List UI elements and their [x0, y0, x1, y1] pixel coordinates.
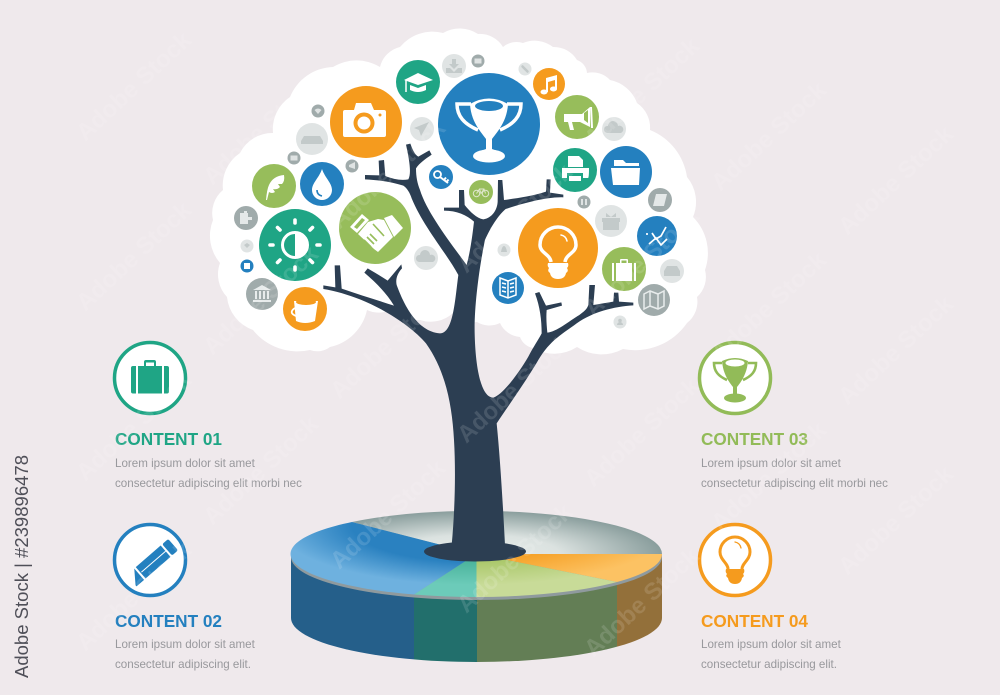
- icon: mail small: [472, 54, 484, 68]
- stock watermark pattern: Adobe Stock: [198, 70, 324, 190]
- body text: consectetur adipiscing elit morbi nec: [701, 477, 888, 490]
- pie sector: green: [476, 554, 617, 597]
- stock watermark pattern: Adobe Stock: [325, 284, 451, 404]
- icon: puzzle: [234, 206, 258, 230]
- body text: [115, 457, 302, 490]
- stock watermark pattern: Adobe Stock: [579, 32, 705, 152]
- icon: map: [638, 284, 670, 316]
- icon: sun brightness: [259, 209, 331, 281]
- panel: content 04: [700, 524, 842, 671]
- heading: CONTENT 04: [701, 611, 808, 631]
- icon: gift: [595, 205, 627, 237]
- stock watermark pattern: Adobe Stock: [452, 328, 578, 448]
- icon: bulb badge: [700, 524, 770, 596]
- icon bubbles on the tree: [234, 54, 684, 331]
- icon: feather: [252, 164, 296, 208]
- stock watermark pattern: Adobe Stock: [833, 290, 959, 410]
- pie chart cylinder base: [291, 511, 662, 664]
- icon: camera: [330, 86, 402, 158]
- stock watermark pattern: Adobe Stock: [833, 120, 959, 240]
- icon: megaphone: [555, 95, 599, 139]
- icon: trophy: [438, 73, 540, 175]
- icon: line chart: [637, 216, 677, 256]
- body text: consectetur adipiscing elit.: [115, 658, 251, 671]
- stock watermark pattern: Adobe Stock: [198, 240, 324, 360]
- stock watermark pattern: Adobe Stock: [325, 114, 451, 234]
- icon: open book: [492, 272, 524, 304]
- cylinder rim: [291, 514, 662, 600]
- heading: CONTENT 02: [115, 611, 222, 631]
- icon: car: [296, 123, 328, 155]
- stock watermark pattern: Adobe Stock: [71, 26, 197, 146]
- icon: cloud: [414, 246, 438, 270]
- icon: taxi: [660, 259, 684, 283]
- icon: briefcase: [602, 247, 646, 291]
- body text: Lorem ipsum dolor sit amet: [701, 457, 842, 470]
- panel: content 03: [700, 342, 888, 490]
- icon: mail: [288, 152, 300, 164]
- body text: [701, 638, 842, 671]
- icon: water drop: [300, 162, 344, 206]
- heading: CONTENT 01: [115, 429, 222, 449]
- stock watermark pattern: Adobe Stock: [71, 196, 197, 316]
- icon: paper plane: [410, 117, 434, 141]
- icon: handshake: [339, 192, 411, 264]
- icon: light bulb: [518, 208, 598, 288]
- stock watermark pattern: Adobe Stock: [452, 158, 578, 278]
- icon: notebook: [648, 188, 672, 212]
- stock watermark pattern: Adobe Stock: [71, 366, 197, 486]
- icon: pencil badge: [114, 524, 186, 596]
- icon: graduation cap: [396, 60, 440, 104]
- pie sector: orange: [476, 554, 662, 582]
- stock watermark pattern: Adobe Stock: [452, 498, 578, 618]
- icon: link: [518, 62, 532, 76]
- icon: pause: [578, 196, 590, 208]
- white tree crown cloud: [210, 28, 708, 354]
- pie sector: grey: [352, 511, 662, 554]
- stock watermark pattern: Adobe Stock: [706, 416, 832, 536]
- body text: Lorem ipsum dolor sit amet: [115, 457, 256, 470]
- tree silhouette: [323, 144, 633, 562]
- stock watermark pattern: Adobe Stock: [198, 410, 324, 530]
- icon: download: [442, 54, 466, 78]
- icon: small blue badge: [240, 260, 254, 272]
- icon: printer: [553, 148, 597, 192]
- pie sector: blue: [291, 522, 476, 594]
- icon: bucket: [283, 287, 327, 331]
- icon: bell: [498, 244, 510, 256]
- body text: Lorem ipsum dolor sit amet: [701, 638, 842, 651]
- icon: bank: [246, 278, 278, 310]
- icon: key: [429, 165, 453, 189]
- stock watermark pattern: Adobe Stock: [706, 76, 832, 196]
- heading: CONTENT 03: [701, 429, 808, 449]
- icon: small badge: [240, 240, 254, 252]
- body text: [115, 638, 256, 671]
- icon: folder: [600, 146, 652, 198]
- body text: consectetur adipiscing elit.: [701, 658, 837, 671]
- stock watermark pattern: Adobe Stock: [579, 542, 705, 662]
- icon: user: [614, 316, 626, 328]
- icon: cloud upload: [602, 117, 626, 141]
- icon: small megaphone: [346, 160, 358, 172]
- stock watermark pattern: Adobe Stock: [706, 246, 832, 366]
- pie sector: teal: [414, 554, 476, 597]
- vertical stock credit line: Adobe Stock | #239896478: [12, 455, 32, 678]
- stock watermark pattern: Adobe Stock: [579, 202, 705, 322]
- panel: content 02: [114, 524, 256, 671]
- icon: bicycle: [469, 180, 493, 204]
- stock watermark pattern: Adobe Stock: [71, 536, 197, 656]
- icon: briefcase badge: [114, 342, 186, 414]
- stock watermark pattern: Adobe Stock: [579, 372, 705, 492]
- body text: consectetur adipiscing elit morbi nec: [115, 477, 302, 490]
- stock watermark pattern: Adobe Stock: [833, 460, 959, 580]
- panel: content 01: [114, 342, 302, 490]
- cylinder side wall: [291, 554, 662, 664]
- body text: Lorem ipsum dolor sit amet: [115, 638, 256, 651]
- body text: [701, 457, 888, 490]
- icon: wifi: [312, 104, 324, 118]
- stock watermark pattern: Adobe Stock: [325, 454, 451, 574]
- icon: trophy badge: [700, 342, 770, 414]
- icon: music note: [533, 68, 565, 100]
